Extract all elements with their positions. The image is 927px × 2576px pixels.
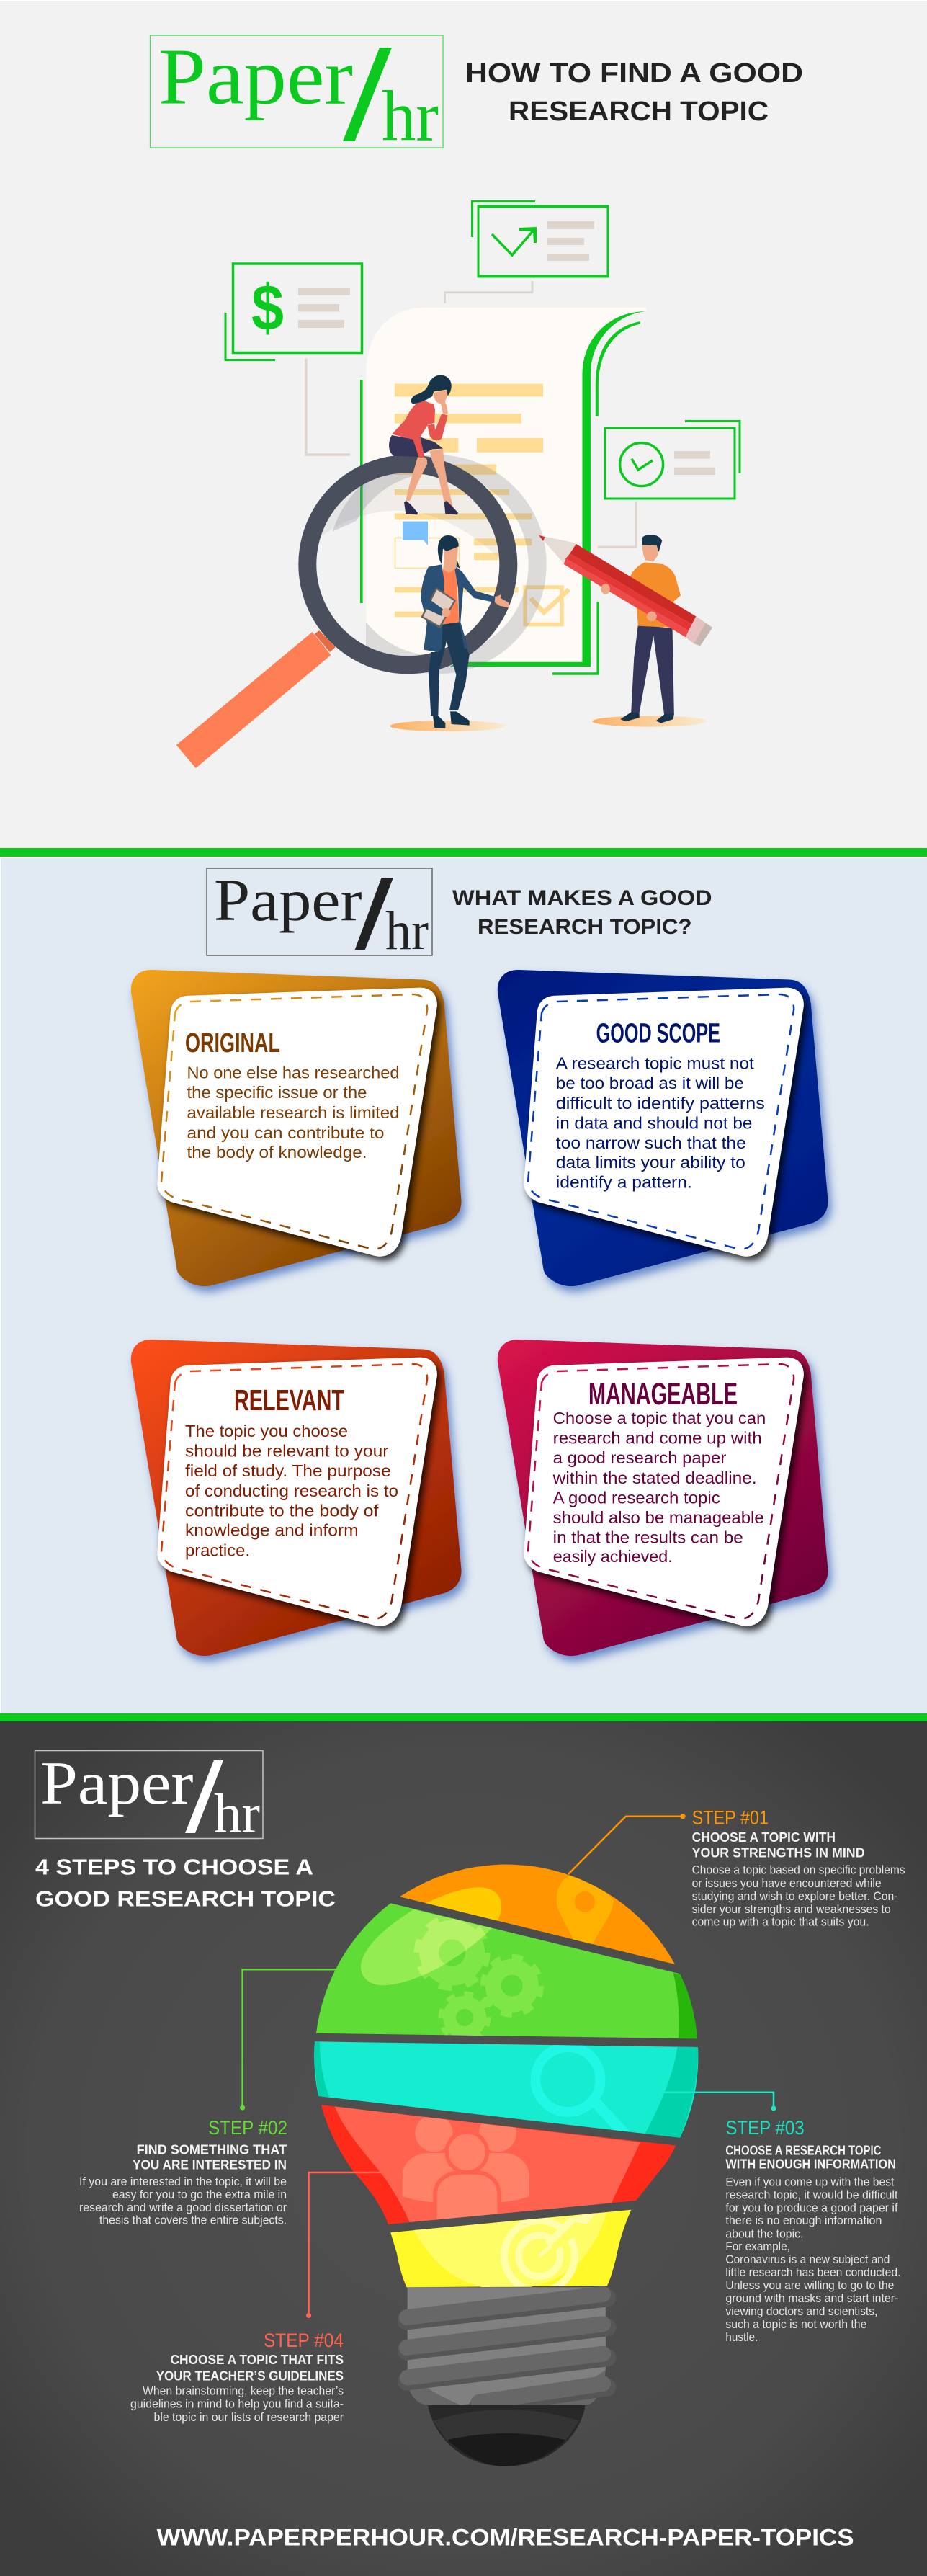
connector: step 04 [306, 2172, 385, 2318]
step label 03: STEP #03 [725, 2117, 805, 2139]
callout: step 02 [79, 1969, 337, 2227]
heading: original: ORIGINAL [185, 1028, 280, 1059]
step text 02 [79, 2175, 287, 2227]
step text 03: Unless you are willing to go to the [725, 2279, 894, 2292]
text: good scope description: A research topic must not [556, 1054, 754, 1073]
step text 01: or issues you have encountered while [692, 1877, 882, 1890]
connector: step 02 [240, 1969, 337, 2111]
step heading 02 [133, 2142, 287, 2172]
person: man holding pencil [539, 535, 712, 723]
connector: step 03 [663, 2093, 776, 2111]
step text 03: Even if you come up with the best [725, 2175, 895, 2188]
card shape: relevant [131, 1340, 462, 1656]
text: relevant description: The topic you choose [185, 1422, 348, 1440]
connector: step 01 [568, 1814, 686, 1874]
step text 01 [692, 1864, 905, 1929]
text: manageable description: Choose a topic that you can [553, 1409, 766, 1427]
magnifier handle [176, 630, 336, 768]
callout: step 01 [568, 1807, 905, 1929]
panel: relevant [131, 1340, 462, 1656]
heading: 4 steps to choose a good research topic [35, 1855, 336, 1912]
step text 03: For example, [725, 2240, 790, 2253]
step text 03: viewing doctors and scientists, [725, 2305, 877, 2318]
heading: good scope: GOOD SCOPE [596, 1019, 720, 1049]
heading: manageable: MANAGEABLE [588, 1377, 738, 1412]
step text 04 [130, 2384, 344, 2424]
heading: what makes a good research topic [452, 886, 712, 939]
logo: white on dark: Paper [40, 1750, 193, 1817]
step text 03: research topic, it would be difficult [725, 2189, 898, 2202]
text: original description: and you can contribute to [187, 1123, 385, 1142]
step heading 03: CHOOSE A RESEARCH TOPIC [725, 2142, 881, 2157]
text: manageable description [552, 1409, 766, 1566]
step text 04: guidelines in mind to help you find a suita- [130, 2398, 344, 2411]
panel: original [131, 970, 462, 1286]
text: manageable description: within the stated deadline. [552, 1469, 757, 1487]
icon: growth arrow card [445, 202, 609, 303]
panel: good scope [498, 970, 828, 1286]
icon: dollar card: $ [251, 272, 284, 344]
step label 01: STEP #01 [692, 1807, 769, 1829]
text: relevant description: contribute to the body of [185, 1502, 379, 1520]
text: manageable description: easily achieved. [553, 1547, 673, 1566]
heading: 4 steps to choose a good research topic: 4 STEPS TO CHOOSE A [35, 1855, 313, 1880]
title: how to find a good research topic: RESEARCH TOPIC [509, 97, 769, 127]
step text 03: for you to produce a good paper if [725, 2201, 898, 2214]
bulb segment: teal magnifier [314, 2041, 698, 2138]
step heading 01: YOUR STRENGTHS IN MIND [692, 1845, 865, 1860]
text: relevant description: practice. [185, 1541, 250, 1559]
step heading 01 [692, 1830, 865, 1860]
magnifier ring [308, 464, 509, 665]
text: original description: available research is limited [187, 1103, 399, 1122]
step text 03: Coronavirus is a new subject and [725, 2253, 890, 2266]
step heading 03: WITH ENOUGH INFORMATION [725, 2157, 896, 2172]
person: standing woman with clipboard [421, 535, 509, 728]
section background: four steps [0, 1721, 927, 2576]
step text 04: ble topic in our lists of research paper [154, 2411, 344, 2424]
step heading 01: CHOOSE A TOPIC WITH [692, 1830, 836, 1845]
step text 03: ground with masks and start inter- [725, 2292, 898, 2305]
footer url: WWW.PAPERPERHOUR.COM/RESEARCH-PAPER-TOPICS [157, 2525, 854, 2551]
title: how to find a good research topic: HOW TO FIND A GOOD [465, 58, 803, 89]
green divider band [0, 848, 927, 857]
step text 01: come up with a topic that suits you. [692, 1916, 869, 1929]
step text 03 [725, 2175, 900, 2344]
pencil [539, 535, 712, 646]
logo: white on dark [35, 1750, 263, 1845]
step text 03: such a topic is not worth the [725, 2318, 866, 2331]
logo: dark on blue: Paper [214, 867, 362, 933]
heading: relevant: RELEVANT [234, 1383, 344, 1417]
step text 01: studying and wish to explore better. Con- [692, 1890, 898, 1903]
title: how to find a good research topic [465, 58, 803, 127]
document decorations [362, 380, 636, 674]
step text 01: Choose a topic based on specific problems [692, 1864, 905, 1877]
bulb segment: green gears [316, 1903, 697, 2041]
callout: step 03 [663, 2093, 900, 2344]
ground shadow ellipses [390, 716, 707, 731]
heading: what makes a good research topic: RESEARCH TOPIC? [478, 915, 692, 939]
text: good scope description: be too broad as it will be [556, 1074, 744, 1092]
document sheet [366, 308, 646, 667]
step text 02: easy for you to go the extra mile in [112, 2188, 287, 2201]
text: manageable description: A good research topic [553, 1489, 720, 1507]
magnifier glass shading [310, 455, 547, 674]
text: good scope description: data limits your ability to [556, 1153, 745, 1172]
step heading 03 [725, 2142, 896, 2172]
text: manageable description: research and come up with [553, 1428, 762, 1447]
section background: illustration [0, 1, 927, 848]
text: good scope description: difficult to identify patterns [556, 1094, 765, 1113]
text: original description: No one else has researched [187, 1064, 399, 1082]
text: relevant description [185, 1422, 398, 1559]
logo: dark on blue: hr [385, 901, 429, 961]
text: relevant description: field of study. The purpose [185, 1461, 391, 1480]
icon: check card [605, 421, 740, 499]
text: relevant description: of conducting research is to [185, 1481, 398, 1500]
step text 01: sider your strengths and weaknesses to [692, 1903, 891, 1916]
text: manageable description: should also be manageable [553, 1508, 764, 1527]
text: good scope description: too narrow such that the [556, 1133, 746, 1152]
logo: green [150, 33, 443, 156]
card shape: good scope [498, 970, 828, 1286]
logo: white on dark: hr [214, 1783, 260, 1845]
text: relevant description: knowledge and inform [185, 1521, 359, 1540]
logo: green: hr [382, 76, 439, 156]
text: good scope description [556, 1054, 765, 1192]
text: good scope description: in data and should not be [556, 1114, 752, 1133]
heading: 4 steps to choose a good research topic: GOOD RESEARCH TOPIC [35, 1886, 336, 1912]
step text 02: thesis that covers the entire subjects. [99, 2214, 287, 2227]
bulb tip [428, 2405, 586, 2466]
step text 03: hustle. [725, 2331, 758, 2344]
bulb screw base [406, 2287, 607, 2406]
icon: dollar card [225, 264, 362, 455]
chart: segmented light bulb [314, 1865, 698, 2466]
text: original description [187, 1064, 399, 1162]
panel: manageable [498, 1340, 828, 1656]
text: good scope description: identify a pattern. [556, 1173, 692, 1192]
heading: what makes a good research topic: WHAT MAKES A GOOD [452, 886, 712, 910]
step heading 04: CHOOSE A TOPIC THAT FITS [170, 2352, 344, 2367]
step text 03: about the topic. [725, 2227, 803, 2240]
step text 03: little research has been conducted. [725, 2266, 900, 2279]
bulb segment: orange location [400, 1865, 675, 1964]
step label 04: STEP #04 [264, 2330, 344, 2351]
green divider band [0, 1713, 927, 1721]
text: manageable description: in that the results can be [553, 1528, 743, 1546]
bulb segment: yellow target [390, 2210, 631, 2291]
text: relevant description: should be relevant to your [185, 1441, 389, 1460]
step heading 02: YOU ARE INTERESTED IN [133, 2157, 287, 2172]
step label 02: STEP #02 [208, 2117, 287, 2139]
text: original description: the body of knowledge. [187, 1143, 367, 1162]
step heading 02: FIND SOMETHING THAT [137, 2142, 287, 2157]
illustration: research document with magnifier and people [176, 202, 740, 768]
callout: step 04 [130, 2172, 385, 2424]
step text 02: research and write a good dissertation or [79, 2201, 287, 2214]
section background: good topic qualities [1, 858, 927, 1713]
step text 03: there is no enough information [725, 2214, 882, 2227]
text: manageable description: a good research paper [553, 1448, 726, 1467]
card shape: original [131, 970, 462, 1286]
step text 02: If you are interested in the topic, it will be [79, 2175, 287, 2188]
step heading 04 [156, 2352, 344, 2384]
text: original description: the specific issue or the [187, 1083, 367, 1102]
step text 04: When brainstorming, keep the teacher’s [143, 2384, 344, 2397]
person: sitting woman [389, 375, 458, 514]
bulb segment: red people [321, 2105, 676, 2224]
logo: green: Paper [158, 33, 353, 121]
card shape: manageable [498, 1340, 828, 1656]
logo: dark on blue [207, 867, 432, 961]
step heading 04: YOUR TEACHER’S GUIDELINES [156, 2368, 344, 2384]
